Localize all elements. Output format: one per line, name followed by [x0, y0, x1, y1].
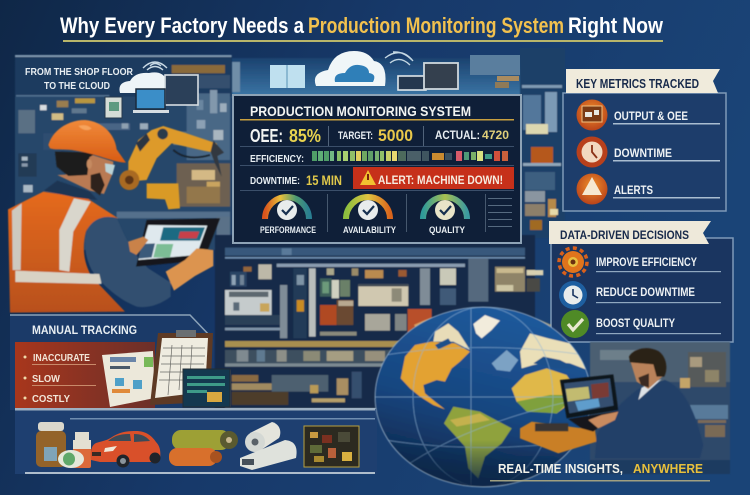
robot arm — [119, 126, 224, 209]
actual metric: 4720 — [482, 128, 509, 142]
icon: output — [576, 100, 608, 130]
text: from the shop floor to the cloud: TO THE CLOUD — [44, 81, 110, 92]
north america — [401, 342, 470, 409]
label: alerts: ALERTS — [614, 183, 653, 197]
OEE metric: OEE: — [250, 126, 283, 146]
icon: fabric rolls — [169, 430, 238, 466]
icon: check — [561, 310, 589, 338]
south america — [444, 407, 512, 478]
panel: manual tracking — [10, 315, 230, 410]
head — [630, 360, 662, 389]
footer tagline: REAL-TIME INSIGHTS, — [498, 462, 623, 476]
icon: clipboard — [150, 330, 213, 405]
efficiency bar — [312, 151, 508, 161]
label: output and oee: OUTPUT & OEE — [614, 109, 688, 123]
icon: clock — [559, 281, 587, 309]
footer tagline — [490, 462, 710, 482]
icon: central cloud and devices — [270, 51, 520, 90]
banner: key metrics: KEY METRICS TRACKED — [576, 76, 699, 91]
footer tagline: ANYWHERE — [633, 462, 703, 476]
desk — [520, 422, 597, 453]
red list — [15, 342, 155, 408]
text: from the shop floor to the cloud — [25, 67, 134, 92]
gauge: performance — [260, 197, 316, 235]
actual metric: ACTUAL: — [435, 128, 480, 142]
sleeve — [85, 216, 171, 307]
hard hat — [48, 120, 126, 163]
analyst with laptop — [520, 348, 703, 458]
icon: jar — [36, 422, 66, 467]
label: boost quality: BOOST QUALITY — [596, 318, 675, 330]
collar — [44, 181, 97, 200]
laptop — [560, 374, 618, 418]
icon: pill bottle and tablets — [58, 432, 91, 468]
suit — [595, 380, 703, 458]
greenland — [473, 315, 500, 338]
factory backdrop, middle — [215, 235, 543, 410]
gauge: quality: QUALITY — [429, 225, 465, 235]
downtime metric — [250, 172, 342, 188]
title: Production Monitoring System — [308, 13, 564, 38]
neck and face — [57, 153, 113, 194]
red list: INACCURATE — [33, 352, 90, 364]
heading: MANUAL TRACKING — [32, 323, 137, 337]
land masses — [401, 315, 592, 478]
panel: data-driven decisions — [549, 221, 733, 342]
gauge: availability — [343, 197, 396, 235]
africa — [512, 368, 577, 413]
downtime metric: 15 MIN — [306, 172, 342, 188]
icon: spreadsheet tablet — [183, 369, 230, 407]
alert banner — [353, 167, 514, 189]
banner: data-driven: DATA-DRIVEN DECISIONS — [560, 228, 689, 242]
icon: alerts — [576, 174, 608, 204]
label: reduce downtime: REDUCE DOWNTIME — [596, 287, 695, 299]
factory backdrop, upper left scene — [15, 55, 232, 250]
gauge: quality — [423, 197, 467, 235]
label: improve efficiency: IMPROVE EFFICIENCY — [596, 257, 697, 269]
gauge: availability: AVAILABILITY — [343, 225, 396, 235]
text: from the shop floor to the cloud: FROM THE SHOP FLOOR — [25, 67, 134, 78]
label: downtime: DOWNTIME — [614, 146, 672, 160]
iceland cloud — [492, 350, 518, 372]
efficiency label: EFFICIENCY: — [250, 154, 304, 165]
dashboard panel — [233, 95, 521, 243]
hands — [166, 248, 213, 291]
red list: SLOW — [32, 373, 60, 385]
alert banner: ALERT: MACHINE DOWN! — [378, 173, 503, 187]
title — [60, 13, 664, 42]
illustration: cloud connectivity top-left — [105, 62, 198, 118]
title: Right Now — [568, 13, 664, 38]
dashboard heading: PRODUCTION MONITORING SYSTEM — [250, 103, 471, 119]
target metric: 5000 — [378, 126, 413, 145]
red list: COSTLY — [32, 393, 70, 405]
panel: key metrics tracked — [563, 69, 726, 211]
panel: product shelf — [15, 408, 377, 474]
downtime metric: DOWNTIME: — [250, 176, 300, 187]
tablet — [136, 218, 220, 267]
icon: paper report — [102, 351, 155, 407]
banner: key metrics — [566, 69, 720, 93]
graticule — [375, 307, 578, 486]
factory backdrop, centre and right strips — [232, 48, 565, 238]
OEE metric: 85% — [289, 126, 321, 146]
globe — [370, 307, 600, 490]
banner: data-driven — [549, 221, 711, 244]
target metric: TARGET: — [338, 130, 373, 142]
icon: downtime clock — [576, 136, 608, 168]
icon: circuit board — [304, 426, 359, 467]
worker with tablet — [8, 120, 220, 313]
OEE metric — [250, 126, 321, 146]
title: Why Every Factory Needs a — [60, 13, 305, 38]
icon: car — [91, 431, 160, 468]
background: analyst office — [590, 342, 730, 474]
europe — [520, 333, 592, 372]
safety vest — [8, 192, 125, 313]
icon: gear — [559, 248, 587, 276]
target metric — [338, 126, 413, 145]
icon: paper rolls — [240, 422, 297, 470]
gauge: performance: PERFORMANCE — [260, 225, 316, 235]
